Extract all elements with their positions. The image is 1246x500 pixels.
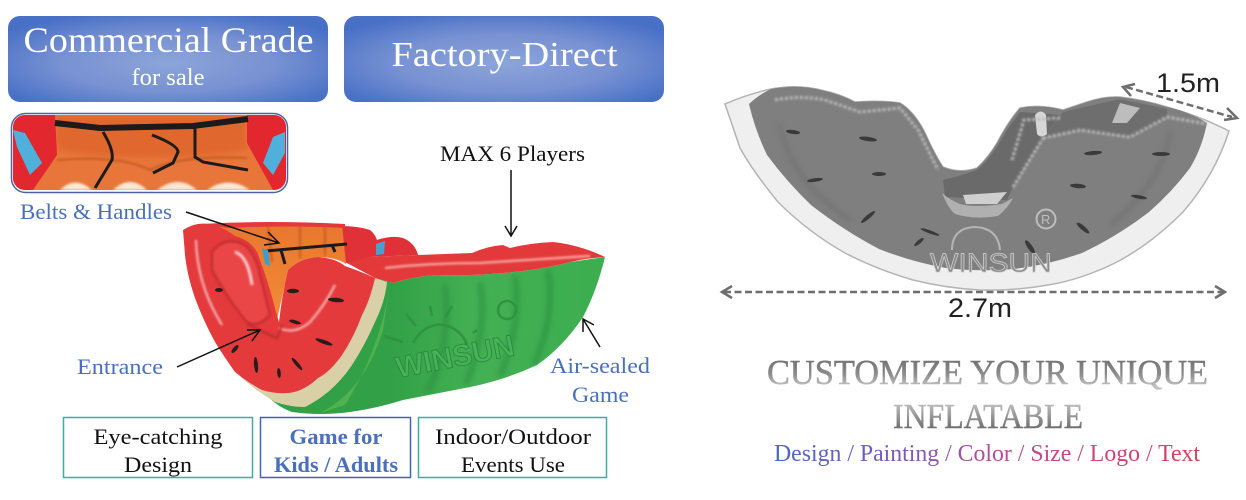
grayscale dimension photo: WINSUN	[930, 248, 1052, 278]
right back bolster	[340, 226, 418, 263]
button: Commercial Grade for sale: for sale	[132, 65, 204, 91]
WINSUN logo	[384, 301, 516, 345]
label: Air-sealed Game	[550, 353, 650, 407]
light strip in seat	[963, 192, 1007, 204]
dimension: width 1.5m	[1123, 68, 1237, 120]
button: Factory-Direct	[344, 16, 664, 102]
button: Commercial Grade for sale	[8, 16, 328, 102]
feature box: Indoor/Outdoor Events Use	[418, 418, 606, 478]
label: Entrance: Entrance	[77, 354, 163, 379]
back rim	[345, 242, 605, 283]
dimension: width 1.5m: 1.5m	[1156, 68, 1220, 98]
button: Factory-Direct: Factory-Direct	[392, 35, 618, 74]
feature box: Eye-catching Design	[64, 418, 252, 478]
arrow: air-sealed	[583, 319, 600, 347]
registered mark and logo	[1036, 210, 1056, 228]
feature box: Indoor/Outdoor Events Use: Events Use	[461, 452, 565, 477]
label: Air-sealed Game: Air-sealed	[550, 353, 650, 378]
button: Commercial Grade for sale: Commercial Grade	[24, 20, 314, 60]
feature box: Indoor/Outdoor Events Use: Indoor/Outdoor	[435, 424, 592, 449]
grayscale dimension photo: R	[1041, 212, 1050, 227]
feature box: Game for Kids / Adults	[260, 418, 410, 478]
dimension: length 2.7m	[722, 286, 1225, 323]
orange interior	[210, 224, 346, 320]
melon seeds	[215, 288, 344, 378]
face shading	[212, 241, 270, 324]
heading: customize your unique inflatable: CUSTOMIZE YOUR UNIQUE	[767, 353, 1208, 392]
inner seat shading	[943, 112, 1060, 200]
label: Air-sealed Game: Game	[572, 382, 629, 407]
watermelon inflatable photo: WINSUN	[393, 330, 517, 385]
feature box: Eye-catching Design: Eye-catching	[94, 424, 222, 449]
green rind	[268, 257, 605, 414]
red face and bolster	[183, 224, 375, 393]
heading: customize your unique inflatable: INFLATABLE	[893, 397, 1083, 436]
beige rind	[225, 278, 387, 407]
top red rim	[200, 222, 345, 228]
pale rind	[725, 87, 1229, 290]
grayscale dimension photo	[725, 87, 1229, 290]
arrow: entrance	[177, 330, 260, 367]
arrow: max players	[505, 170, 517, 236]
feature box: Game for Kids / Adults: Kids / Adults	[274, 452, 398, 477]
gray melon body	[749, 87, 1207, 270]
watermelon inflatable photo	[183, 222, 605, 414]
feature box: Eye-catching Design: Design	[124, 452, 192, 477]
feature box: Game for Kids / Adults: Game for	[290, 424, 383, 449]
label: Belts & Handles: Belts & Handles	[20, 199, 172, 224]
seeds	[786, 129, 1170, 255]
customization options line: Design / Painting / Color / Size / Logo / Text	[774, 441, 1200, 467]
seat belt and handles	[266, 244, 347, 264]
photo inset: belts and handles	[12, 114, 288, 192]
dimension: length 2.7m: 2.7m	[948, 293, 1012, 323]
arrow: belts	[186, 212, 279, 245]
label: MAX 6 Players: MAX 6 Players	[440, 141, 585, 166]
front notch ridge	[942, 193, 1013, 218]
heading: customize your unique inflatable	[767, 353, 1208, 436]
